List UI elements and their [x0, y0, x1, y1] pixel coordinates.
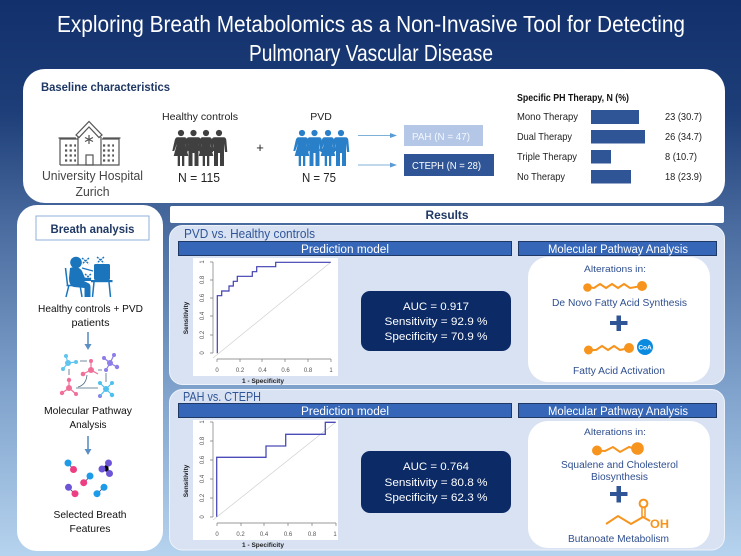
icon: fatty acid with CoA: CoA	[638, 344, 652, 352]
text: molecular pathway analysis	[44, 405, 133, 431]
text: selected breath features: Features	[70, 523, 110, 535]
text: university hospital zurich	[42, 169, 143, 199]
bar chart: specific PH therapy: 8 (10.7)	[665, 151, 697, 163]
icon: squalene chain	[592, 442, 644, 456]
count: healthy controls: N = 115	[178, 171, 220, 185]
chart: ROC curve PVD vs healthy controls: 0.8	[304, 368, 313, 374]
text: molecular pathway analysis: Analysis	[70, 419, 106, 431]
chart: ROC curve PVD vs healthy controls: 0.2	[236, 368, 245, 374]
callout: AUC metrics PAH	[361, 451, 511, 513]
icon: plus	[610, 486, 628, 502]
chart: ROC curve PAH vs CTEPH: 0.8	[200, 436, 206, 445]
chart: ROC curve PVD vs healthy controls: 1	[329, 368, 333, 374]
bar: prediction model: Prediction model	[301, 244, 389, 256]
panel: PVD vs healthy controls	[170, 226, 724, 385]
chart: ROC curve PVD vs healthy controls: 0.6	[200, 293, 206, 302]
text: squalene and cholesterol biosynthesis	[561, 460, 678, 483]
icon: butanoic acid structure	[606, 500, 669, 531]
text: molecular pathway analysis: Molecular Pathway	[44, 405, 133, 417]
chart: ROC curve PAH vs CTEPH: 0.6	[284, 532, 293, 538]
bar chart: specific PH therapy: Specific PH Therapy, N (%)	[517, 93, 629, 104]
text: healthy controls + pvd patients: patients	[72, 317, 110, 329]
heading bar: results: Results	[426, 210, 468, 222]
bar: molecular pathway analysis	[518, 242, 716, 256]
chart: ROC curve PAH vs CTEPH: 0.2	[200, 493, 206, 502]
text: squalene and cholesterol biosynthesis: Biosynthesis	[591, 472, 648, 483]
arrow: to cteph	[358, 162, 397, 168]
chart: ROC curve PVD vs healthy controls: 1 - Specificity	[242, 378, 284, 385]
label: pvd: PVD	[310, 111, 332, 123]
bar: prediction model	[178, 242, 512, 256]
text: de novo fatty acid synthesis: De Novo Fatty Acid Synthesis	[552, 298, 687, 309]
icon: plus	[610, 316, 628, 331]
icon: fatty acid chain	[583, 281, 647, 292]
callout: AUC metrics PVD: AUC = 0.917	[403, 301, 469, 313]
chart: ROC curve PVD vs healthy controls: 1	[200, 260, 206, 264]
arrow: down to pathway analysis	[84, 332, 92, 350]
panel: pathway alterations PAH	[528, 421, 710, 548]
text: butanoate metabolism: Butanoate Metabolism	[568, 534, 669, 545]
chart: ROC curve PAH vs CTEPH: 0.8	[308, 532, 317, 538]
bar chart: specific PH therapy: Triple Therapy	[517, 151, 578, 163]
box: cteph	[404, 154, 494, 176]
callout: AUC metrics PVD: Specificity = 70.9 %	[384, 331, 488, 343]
text: selected breath features: Selected Breath	[54, 509, 127, 521]
chart: ROC curve PAH vs CTEPH: 0.4	[260, 532, 269, 538]
chart: ROC curve PAH vs CTEPH: Sensitivity	[183, 464, 190, 497]
icon: person breathing into device	[66, 257, 112, 297]
bar chart: specific PH therapy: Dual Therapy	[517, 131, 573, 143]
chart: ROC curve PAH vs CTEPH	[183, 420, 338, 549]
text: healthy controls + pvd patients: Healthy controls + PVD	[38, 303, 143, 315]
heading: PAH vs CTEPH: PAH vs. CTEPH	[183, 389, 261, 404]
callout: AUC metrics PAH: Sensitivity = 80.8 %	[384, 477, 488, 489]
heading: breath analysis	[36, 216, 149, 240]
text: alterations in: Alterations in:	[584, 427, 646, 438]
count: pvd: N = 75	[302, 171, 336, 185]
text: squalene and cholesterol biosynthesis: Squalene and Cholesterol	[561, 460, 678, 471]
chart: ROC curve PVD vs healthy controls: 0.8	[200, 275, 206, 284]
box: cteph: CTEPH (N = 28)	[412, 160, 481, 172]
icon: hospital	[58, 122, 120, 165]
icon: pvd people	[293, 130, 349, 166]
heading: breath analysis: Breath analysis	[50, 222, 135, 236]
chart: ROC curve PVD vs healthy controls: 0.2	[200, 330, 206, 339]
icon: healthy control people	[172, 130, 227, 166]
chart: ROC curve PAH vs CTEPH: 0.2	[236, 532, 245, 538]
bar: prediction model: Prediction model	[301, 406, 389, 418]
title: Pulmonary Vascular Disease	[249, 40, 493, 66]
panel: PAH vs CTEPH	[170, 389, 724, 550]
callout: AUC metrics PAH: AUC = 0.764	[403, 461, 469, 473]
callout: AUC metrics PVD: Sensitivity = 92.9 %	[384, 316, 488, 328]
bar: prediction model	[178, 404, 512, 418]
chart: ROC curve PVD vs healthy controls: 0	[200, 351, 206, 355]
arrow: down to selected features	[84, 436, 92, 455]
bar: molecular pathway analysis: Molecular Pathway Analysis	[548, 406, 688, 418]
chart: ROC curve PVD vs healthy controls: Sensitivity	[183, 301, 190, 334]
bar chart: specific PH therapy	[517, 93, 702, 184]
heading: PVD vs healthy controls: PVD vs. Healthy controls	[184, 226, 315, 241]
chart: ROC curve PVD vs healthy controls	[183, 258, 338, 385]
icon: selected breath features	[64, 460, 113, 497]
text: fatty acid activation: Fatty Acid Activation	[573, 366, 665, 377]
panel: pathway alterations PVD	[528, 257, 710, 382]
text: healthy controls + pvd patients	[38, 303, 143, 329]
arrow: to pah	[358, 133, 397, 138]
chart: ROC curve PVD vs healthy controls: 0	[215, 368, 219, 374]
chart: ROC curve PAH vs CTEPH: 0	[215, 532, 219, 538]
icon: fatty acid with CoA	[584, 339, 653, 355]
chart: ROC curve PVD vs healthy controls: 0.6	[281, 368, 290, 374]
bar: molecular pathway analysis	[518, 404, 716, 418]
label: healthy controls: Healthy controls	[162, 111, 238, 123]
bar chart: specific PH therapy: Mono Therapy	[517, 111, 579, 123]
chart: ROC curve PAH vs CTEPH: 0	[200, 515, 206, 519]
chart: ROC curve PVD vs healthy controls: 0.4	[200, 311, 206, 320]
bar chart: specific PH therapy: 18 (23.9)	[665, 171, 702, 183]
box: pah	[404, 125, 483, 146]
text: alterations in: Alterations in:	[584, 264, 646, 275]
heading bar: results	[170, 206, 724, 223]
bar chart: specific PH therapy: 23 (30.7)	[665, 111, 702, 123]
text: university hospital zurich: Zurich	[76, 185, 110, 199]
chart: ROC curve PAH vs CTEPH: 0.6	[200, 455, 206, 464]
plus sign: +	[256, 140, 264, 155]
chart: ROC curve PAH vs CTEPH: 1	[200, 420, 206, 424]
chart: ROC curve PAH vs CTEPH: 0.4	[200, 474, 206, 483]
title	[57, 11, 685, 66]
chart: ROC curve PAH vs CTEPH: 1	[333, 532, 337, 538]
icon: molecular network	[60, 353, 119, 398]
text: university hospital zurich: University Hospital	[42, 169, 143, 183]
heading: baseline characteristics: Baseline characteristics	[41, 80, 170, 94]
bar chart: specific PH therapy: 26 (34.7)	[665, 131, 702, 143]
panel: baseline characteristics	[23, 69, 725, 203]
callout: AUC metrics PVD	[361, 291, 511, 351]
text: selected breath features	[54, 509, 127, 535]
box: pah: PAH (N = 47)	[412, 131, 470, 143]
chart: ROC curve PAH vs CTEPH: 1 - Specificity	[242, 542, 284, 549]
icon: butanoic acid structure: OH	[650, 517, 669, 531]
callout: AUC metrics PAH: Specificity = 62.3 %	[384, 492, 488, 504]
bar chart: specific PH therapy: No Therapy	[517, 171, 566, 183]
panel: breath analysis	[17, 205, 163, 551]
chart: ROC curve PVD vs healthy controls: 0.4	[258, 368, 267, 374]
bar: molecular pathway analysis: Molecular Pathway Analysis	[548, 244, 688, 256]
